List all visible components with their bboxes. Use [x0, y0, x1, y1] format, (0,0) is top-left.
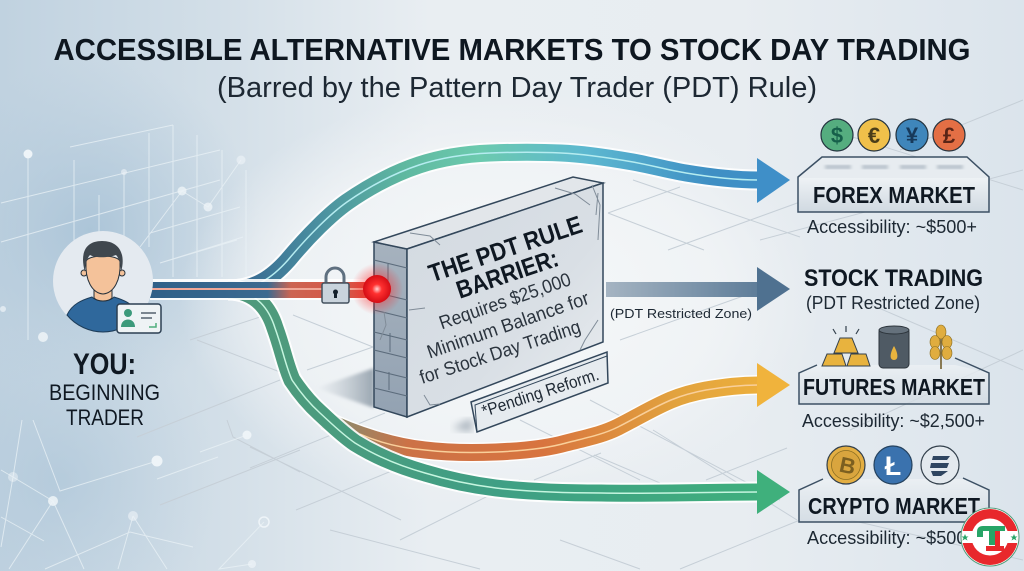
crypto market: CRYPTO MARKET	[808, 493, 981, 519]
futures market: FUTURES MARKET	[803, 374, 986, 400]
pending reform plate	[452, 352, 608, 432]
currency icons: $	[831, 123, 843, 148]
subtitle: (Barred by the Pattern Day Trader (PDT) Rule)	[217, 72, 817, 104]
currency icons	[821, 119, 965, 151]
stock trading label	[804, 265, 983, 313]
icon: ID card	[117, 304, 161, 333]
forex market: FOREX MARKET	[813, 182, 976, 208]
you label: YOU:	[73, 348, 136, 381]
you label: BEGINNING	[49, 380, 160, 405]
glowing red stop light	[351, 263, 403, 315]
trader avatar	[53, 231, 161, 333]
futures market: Accessibility: ~$2,500+	[802, 411, 985, 431]
futures market	[799, 325, 989, 431]
arrow: to forex market	[228, 152, 790, 290]
icons: crypto coins	[827, 446, 959, 484]
icons: gold, oil, wheat	[822, 325, 952, 369]
barrier wall	[374, 177, 603, 417]
barrier requirement text: Minimum Balance for	[424, 288, 593, 363]
stock trading label: (PDT Restricted Zone)	[806, 293, 980, 313]
crypto market: Accessibility: ~$500+	[807, 528, 977, 548]
arrow: to futures market	[325, 363, 790, 453]
barrier requirement text: Requires $25,000	[437, 269, 574, 334]
logo badge	[961, 508, 1019, 566]
barrier heading: THE PDT RULE	[425, 211, 586, 288]
currency icons: ¥	[906, 123, 919, 148]
forex market: Accessibility: ~$500+	[807, 217, 977, 237]
currency icons: £	[943, 123, 956, 148]
barrier heading	[425, 211, 586, 305]
forex market	[798, 119, 989, 237]
wall ground shadow	[316, 368, 374, 408]
currency icons: €	[868, 123, 880, 148]
pending reform plate: *Pending Reform.	[479, 365, 601, 421]
barrier heading: BARRIER:	[453, 244, 562, 305]
stock trading label: STOCK TRADING	[804, 265, 983, 292]
arrow: to crypto market	[228, 290, 790, 514]
you label	[49, 348, 160, 430]
icons: crypto coins: Ł	[885, 451, 901, 481]
barrier requirement text: for Stock Day Trading	[417, 317, 583, 389]
restricted zone label: (PDT Restricted Zone)	[610, 306, 752, 321]
title: ACCESSIBLE ALTERNATIVE MARKETS TO STOCK DAY TRADING	[54, 32, 970, 67]
you label: TRADER	[66, 405, 144, 430]
path: you to barrier	[150, 279, 385, 300]
crypto market	[799, 446, 989, 548]
arrow: restricted stock trading	[606, 267, 790, 311]
icons: crypto coins: B	[837, 452, 858, 480]
icon: padlock	[322, 268, 349, 303]
barrier requirement text	[417, 269, 593, 389]
